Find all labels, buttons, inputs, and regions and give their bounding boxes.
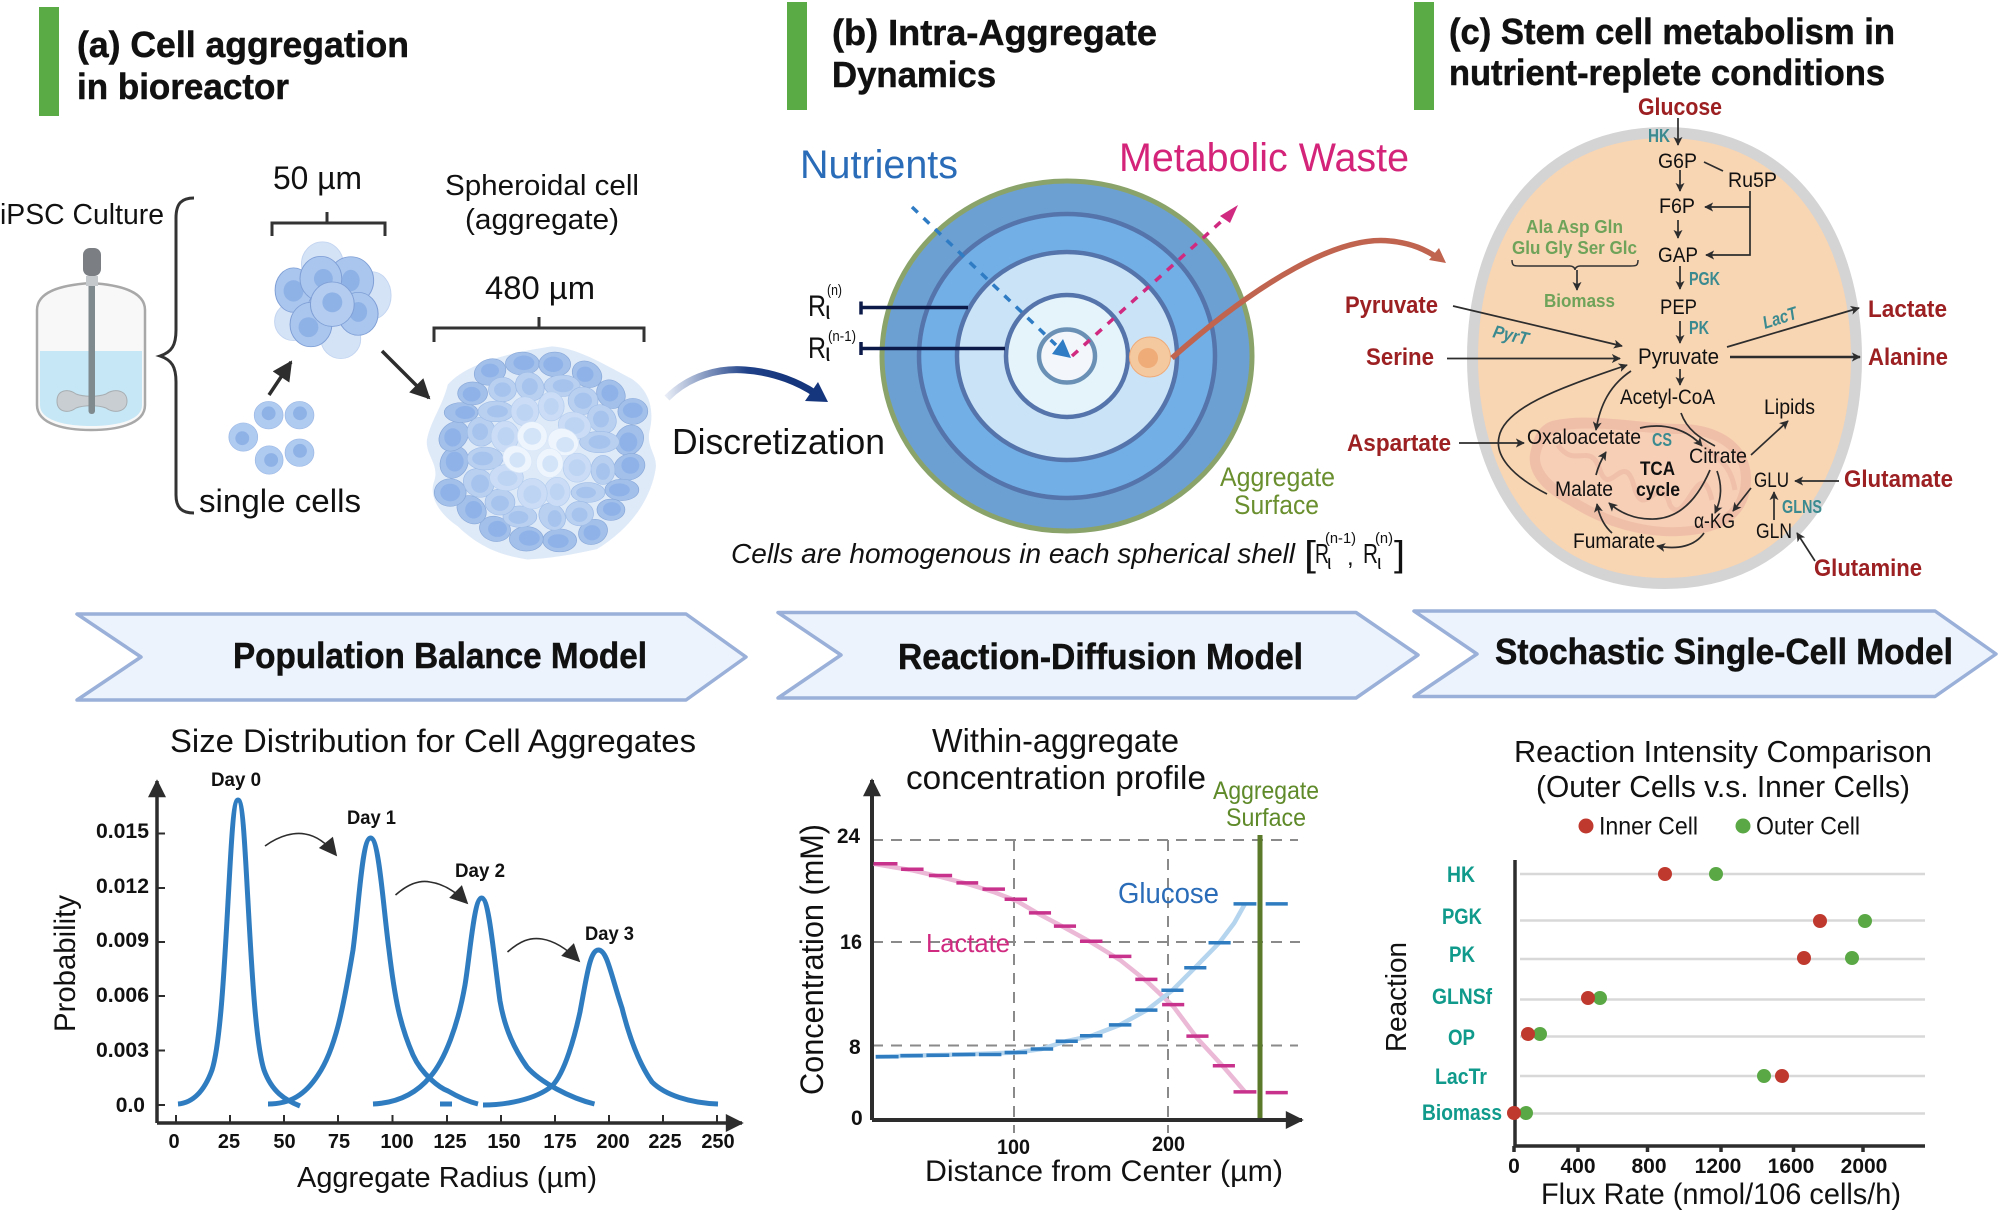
banner: reaction-diffusion model <box>778 612 1418 698</box>
enzyme labels: PyrT <box>1491 321 1532 349</box>
label: aggregate surface: Aggregate <box>1213 777 1319 805</box>
metabolite labels: Malate <box>1555 478 1613 501</box>
icon: small cell cluster <box>275 242 391 359</box>
heading (b): (b) Intra-Aggregate <box>832 12 1157 53</box>
series: lactate <box>874 864 1288 1093</box>
axes <box>1514 860 1925 1152</box>
biomass precursors: Biomass <box>1544 291 1615 311</box>
label: 480 um: 480 µm <box>485 270 595 306</box>
label: shell radius n-1: R <box>808 332 826 365</box>
panel: (b) intra-aggregate dynamics <box>731 2 1446 574</box>
external metabolites: Pyruvate <box>1345 292 1438 319</box>
label: spheroidal cell aggregate <box>445 170 639 236</box>
arrow: zoom to single cell <box>1172 240 1446 358</box>
arrow: cluster to aggregate <box>382 351 429 398</box>
metabolite labels: GLN <box>1756 520 1792 543</box>
x tick labels: 2000 <box>1841 1155 1887 1178</box>
heading (b) <box>832 12 1157 95</box>
caption: homogenous shells: ] <box>1394 533 1405 574</box>
label: TCA cycle: cycle <box>1636 480 1680 501</box>
arrow: waste diffusion <box>1072 205 1238 356</box>
enzyme labels: CS <box>1652 430 1672 450</box>
reaction labels: Biomass <box>1422 1100 1502 1125</box>
banner: reaction-diffusion model: Reaction-Diffusion Model <box>898 636 1303 677</box>
y tick labels: 0.015 <box>96 820 149 843</box>
label: shell radius n-1: ι <box>825 339 831 367</box>
icon: single cells <box>229 401 314 474</box>
label: spheroidal cell aggregate: Spheroidal cell <box>445 170 639 202</box>
x tick labels: 0 <box>1508 1155 1520 1178</box>
x tick labels: 1200 <box>1695 1155 1741 1178</box>
label: aggregate surface <box>1213 777 1319 832</box>
diagram: concentric spherical shells <box>882 181 1252 531</box>
heading (c) <box>1449 11 1895 93</box>
x tick labels: 1600 <box>1768 1155 1814 1178</box>
enzyme labels: PK <box>1689 318 1709 338</box>
caption: homogenous shells: ι <box>1327 552 1331 574</box>
label: TCA cycle: TCA <box>1640 459 1675 480</box>
legend: Outer Cell <box>1756 812 1860 840</box>
label: aggregate surface: Surface <box>1226 804 1306 832</box>
label: shell radius n-1 <box>808 328 1005 367</box>
axis titles <box>49 895 597 1194</box>
axes <box>872 780 1302 1120</box>
chart title: concentration profile <box>906 759 1206 796</box>
chart: concentration profile <box>794 722 1319 1188</box>
outer cell dots <box>1519 867 1872 1120</box>
icon: mitochondrion <box>1530 418 1751 536</box>
external metabolites: Serine <box>1366 344 1434 371</box>
axis titles <box>794 824 1283 1188</box>
caption: homogenous shells: , <box>1347 544 1354 571</box>
metabolite labels <box>1527 150 1815 553</box>
label: iPSC culture: iPSC Culture <box>0 199 164 231</box>
x tick labels: 175 <box>543 1131 577 1153</box>
reaction labels: HK <box>1447 862 1475 887</box>
x tick labels: 75 <box>328 1131 350 1153</box>
banner: population balance model: Population Balance Model <box>233 635 647 676</box>
axis titles: Distance from Center (µm) <box>925 1155 1283 1188</box>
chart title <box>1514 734 1932 804</box>
axis tick labels: 8 <box>849 1036 861 1059</box>
metabolite labels: PEP <box>1660 296 1697 319</box>
caption: homogenous shells: [ <box>1304 533 1316 574</box>
axis tick labels <box>837 825 1185 1159</box>
axis titles: Aggregate Radius (µm) <box>297 1162 597 1194</box>
brace <box>160 198 194 513</box>
x tick labels <box>168 1131 735 1153</box>
progression arrows <box>265 833 579 961</box>
metabolite labels: Citrate <box>1689 445 1747 468</box>
x tick labels: 800 <box>1631 1155 1667 1178</box>
bracket: 480 um <box>434 317 644 342</box>
metabolite labels: G6P <box>1658 150 1697 173</box>
icon: spheroidal aggregate <box>427 346 656 560</box>
icon: cell body <box>1472 132 1856 584</box>
caption: homogenous shells: ι <box>1377 552 1381 574</box>
legend: Inner Cell <box>1599 812 1698 840</box>
heading bar (c) <box>1414 2 1434 110</box>
metabolite labels: Fumarate <box>1573 530 1655 553</box>
enzyme labels: PGK <box>1689 269 1720 289</box>
heading (c): nutrient-replete conditions <box>1449 52 1885 93</box>
y tick labels: 0.0 <box>116 1094 145 1117</box>
axis titles: Reaction <box>1381 942 1413 1052</box>
label: aggregate surface: Aggregate <box>1220 462 1335 492</box>
label: 50 um: 50 µm <box>273 160 362 196</box>
bracket: 50 um <box>272 212 385 236</box>
heading (c): (c) Stem cell metabolism in <box>1449 11 1895 52</box>
heading (b): Dynamics <box>832 54 996 95</box>
day labels <box>211 770 634 945</box>
metabolite labels: Oxaloacetate <box>1527 426 1641 449</box>
label: shell radius n: (n) <box>827 282 842 299</box>
axis tick labels: 16 <box>840 931 862 954</box>
axis tick labels: 100 <box>997 1136 1030 1159</box>
x tick labels: 150 <box>487 1131 521 1153</box>
metabolite labels: F6P <box>1659 195 1695 218</box>
label: discretization: Discretization <box>672 421 885 462</box>
arrow: nutrient diffusion <box>912 207 1071 358</box>
x tick labels: 200 <box>596 1131 630 1153</box>
biomass precursors <box>1512 217 1638 311</box>
label: spheroidal cell aggregate: (aggregate) <box>465 204 619 236</box>
panel: (a) cell aggregation <box>0 7 656 560</box>
y tick labels: 0.006 <box>96 984 149 1007</box>
biomass precursors: Ala Asp Gln <box>1526 217 1623 237</box>
heading (a): (a) Cell aggregation <box>77 24 409 65</box>
day labels: Day 2 <box>455 861 505 882</box>
metabolite labels: GAP <box>1658 244 1698 267</box>
external metabolites: Glutamate <box>1844 466 1953 493</box>
label: metabolic waste: Metabolic Waste <box>1119 136 1409 180</box>
axis tick labels: 200 <box>1152 1133 1185 1156</box>
heading (a): in bioreactor <box>77 66 289 107</box>
x tick labels <box>1508 1155 1887 1178</box>
metabolite labels: Ru5P <box>1728 169 1777 192</box>
day labels: Day 1 <box>347 808 396 829</box>
label: shell radius n <box>808 282 968 325</box>
x tick labels: 125 <box>433 1131 467 1153</box>
aggregate surface line <box>1258 835 1262 1118</box>
caption: homogenous shells: Cells are homogenous in each spherical shell <box>731 538 1296 569</box>
enzyme labels: HK <box>1648 126 1670 146</box>
x tick labels: 50 <box>273 1131 296 1153</box>
label: shell radius n-1: (n-1) <box>828 328 856 345</box>
x tick labels: 250 <box>701 1131 735 1153</box>
external metabolites: Aspartate <box>1347 430 1451 457</box>
reaction labels: GLNSf <box>1432 984 1493 1009</box>
reaction labels <box>1422 862 1502 1125</box>
axis tick labels: 24 <box>837 825 860 848</box>
heading bar (a) <box>39 7 59 116</box>
chart title <box>906 722 1206 796</box>
label: shell radius n: R <box>808 290 826 323</box>
banner: stochastic single-cell model <box>1414 611 1996 696</box>
day labels: Day 3 <box>585 924 634 945</box>
day labels: Day 0 <box>211 770 261 791</box>
enzyme labels: GLNS <box>1782 497 1822 517</box>
labels: series names: Glucose <box>1118 878 1219 910</box>
label: nutrients: Nutrients <box>800 143 958 187</box>
biomass precursors: Glu Gly Ser Glc <box>1512 238 1637 258</box>
series: glucose <box>876 904 1288 1057</box>
external metabolites: Lactate <box>1868 296 1947 323</box>
pathway arrows <box>1447 118 1860 561</box>
label: single cells: single cells <box>199 483 361 519</box>
heading bar (b) <box>787 2 807 110</box>
heading (a) <box>77 24 409 107</box>
metabolite labels: GLU <box>1754 469 1789 492</box>
reaction labels: PGK <box>1442 904 1482 929</box>
metabolite labels: Pyruvate <box>1638 344 1719 369</box>
metabolite labels: α-KG <box>1694 510 1735 533</box>
caption: homogenous shells: R <box>1363 538 1378 569</box>
banner: stochastic single-cell model: Stochastic Single-Cell Model <box>1495 631 1953 672</box>
reaction labels: PK <box>1449 942 1475 967</box>
y tick labels: 0.003 <box>96 1039 149 1062</box>
legend <box>1578 812 1860 840</box>
axis titles: Concentration (mM) <box>794 824 830 1095</box>
axis titles: Probability <box>49 895 82 1032</box>
reaction labels: LacTr <box>1435 1064 1487 1089</box>
y tick labels: 0.009 <box>96 929 149 952</box>
label: aggregate surface <box>1220 462 1335 520</box>
x tick labels: 0 <box>168 1131 180 1153</box>
chart title: Reaction Intensity Comparison <box>1514 734 1932 769</box>
metabolite labels: Lipids <box>1764 396 1815 419</box>
chart title: (Outer Cells v.s. Inner Cells) <box>1536 769 1910 804</box>
chart title: Size Distribution for Cell Aggregates <box>170 723 696 759</box>
caption: homogenous shells <box>731 530 1405 574</box>
metabolite labels: Acetyl-CoA <box>1620 386 1715 409</box>
chart title: Within-aggregate <box>932 722 1179 759</box>
reaction labels: OP <box>1448 1025 1475 1050</box>
x tick labels: 225 <box>648 1131 682 1153</box>
caption: homogenous shells: R <box>1315 538 1329 569</box>
external metabolites <box>1345 94 1953 582</box>
x tick labels: 100 <box>380 1131 414 1153</box>
external metabolites: Alanine <box>1868 344 1948 371</box>
label: aggregate surface: Surface <box>1234 490 1319 520</box>
inner cell dots <box>1507 867 1827 1120</box>
enzyme labels <box>1491 126 1822 517</box>
y tick labels <box>96 820 149 1117</box>
panel: (c) stem cell metabolism <box>1345 2 1953 584</box>
labels: series names <box>926 878 1219 958</box>
axes <box>157 781 742 1123</box>
axis tick labels: 0 <box>851 1107 863 1130</box>
caption: homogenous shells: (n-1) <box>1325 530 1356 547</box>
caption: homogenous shells: (n) <box>1375 530 1393 547</box>
icon: cell in shell <box>1130 337 1170 377</box>
x tick labels: 400 <box>1560 1155 1596 1178</box>
icon: bioreactor <box>37 248 145 430</box>
distribution curves <box>178 800 718 1106</box>
external metabolites: Glucose <box>1638 94 1722 121</box>
arrow: discretization <box>667 370 828 402</box>
banner: population balance model <box>77 614 746 700</box>
chart: reaction intensity comparison <box>1381 734 1932 1210</box>
label: TCA cycle <box>1636 459 1680 501</box>
arrow: single cells to cluster <box>269 362 291 395</box>
axis titles <box>1381 942 1901 1210</box>
x tick labels: 25 <box>218 1131 240 1153</box>
labels: series names: Lactate <box>926 928 1010 958</box>
enzyme labels: LacT <box>1760 302 1801 333</box>
y tick labels: 0.012 <box>96 875 149 898</box>
chart: size distribution <box>49 723 742 1194</box>
label: shell radius n: ι <box>825 297 831 325</box>
external metabolites: Glutamine <box>1814 555 1922 582</box>
